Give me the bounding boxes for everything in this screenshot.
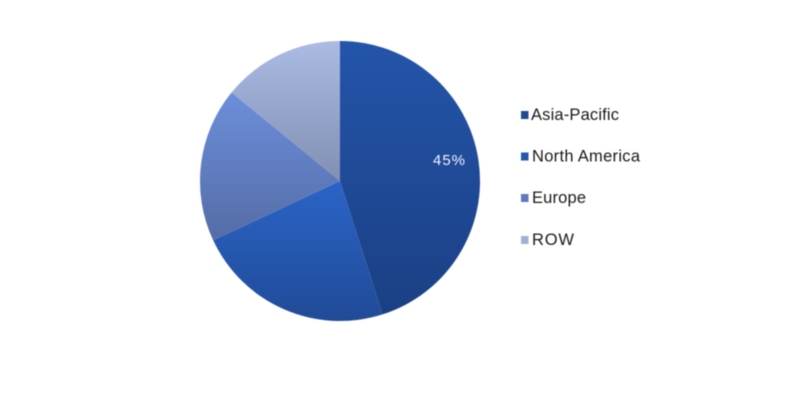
legend	[521, 106, 641, 249]
legend item: ROW: ROW	[532, 231, 574, 249]
pie chart	[200, 41, 480, 321]
slice: Asia-Pacific	[340, 41, 480, 314]
slice: ROW	[232, 41, 340, 181]
slice: Europe	[200, 92, 340, 240]
data label: 45%: 45%	[433, 152, 465, 169]
legend item: Europe: Europe	[532, 189, 586, 207]
slice: North America	[213, 181, 382, 321]
legend item: North America: North America	[532, 148, 641, 166]
legend item: Asia-Pacific: Asia-Pacific	[531, 106, 619, 124]
